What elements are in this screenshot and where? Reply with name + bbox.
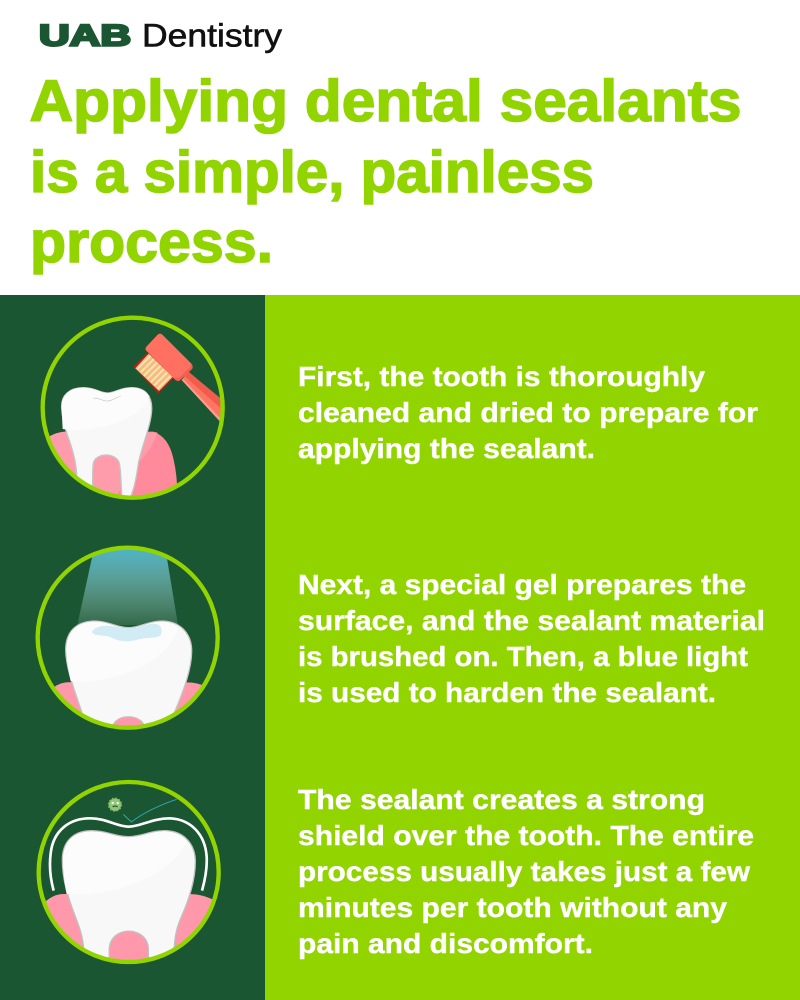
- title: process.: [30, 210, 273, 275]
- text block: step 2: is brushed on. Then, a blue light: [298, 641, 748, 672]
- root gum: [113, 716, 144, 726]
- tooth: [65, 620, 192, 724]
- icon: sealed tooth shield: [36, 780, 221, 964]
- text block: step 3: pain and discomfort.: [298, 928, 593, 959]
- text block: step 3: The sealant creates a strong: [298, 784, 705, 815]
- text block: step 1: [298, 361, 758, 464]
- text block: step 2: [298, 569, 765, 708]
- tooth: [62, 388, 152, 497]
- text block: step 2: surface, and the sealant material: [298, 605, 765, 636]
- logo: UAB Dentistry: Dentistry: [142, 18, 282, 54]
- text block: step 1: First, the tooth is thoroughly: [298, 361, 705, 392]
- blue light beam: [77, 548, 178, 625]
- title: Applying dental sealants: [30, 69, 741, 134]
- text block: step 3: process usually takes just a few: [298, 856, 750, 887]
- text block: step 1: cleaned and dried to prepare for: [298, 397, 758, 428]
- panel: left dark green: [0, 295, 265, 1000]
- gum: [50, 432, 177, 496]
- logo: UAB Dentistry: [39, 18, 282, 54]
- panel: right lime green: [265, 295, 800, 1000]
- icon: tooth being brushed: [40, 316, 225, 500]
- text block: step 3: [298, 784, 754, 959]
- text block: step 3: minutes per tooth without any: [298, 892, 727, 923]
- toothbrush: [133, 334, 220, 421]
- ring: [38, 548, 218, 728]
- sealant gel: [92, 624, 162, 641]
- deflection arrow: [123, 799, 177, 822]
- gum: [54, 682, 202, 712]
- ring: [39, 782, 219, 962]
- icon: blue light curing sealant: [36, 546, 220, 730]
- title: [30, 69, 741, 275]
- shield line: [50, 818, 207, 891]
- text block: step 2: Next, a special gel prepares the: [298, 569, 746, 600]
- text block: step 2: is used to harden the sealant.: [298, 677, 716, 708]
- logo: UAB Dentistry: UAB: [39, 20, 131, 52]
- root gum: [108, 930, 149, 960]
- text block: step 1: applying the sealant.: [298, 433, 595, 464]
- gums: [46, 894, 83, 947]
- tooth: [62, 831, 195, 967]
- germ: [109, 798, 121, 811]
- ring: [43, 318, 223, 498]
- text block: step 3: shield over the tooth. The entire: [298, 820, 754, 851]
- title: is a simple, painless: [30, 140, 594, 205]
